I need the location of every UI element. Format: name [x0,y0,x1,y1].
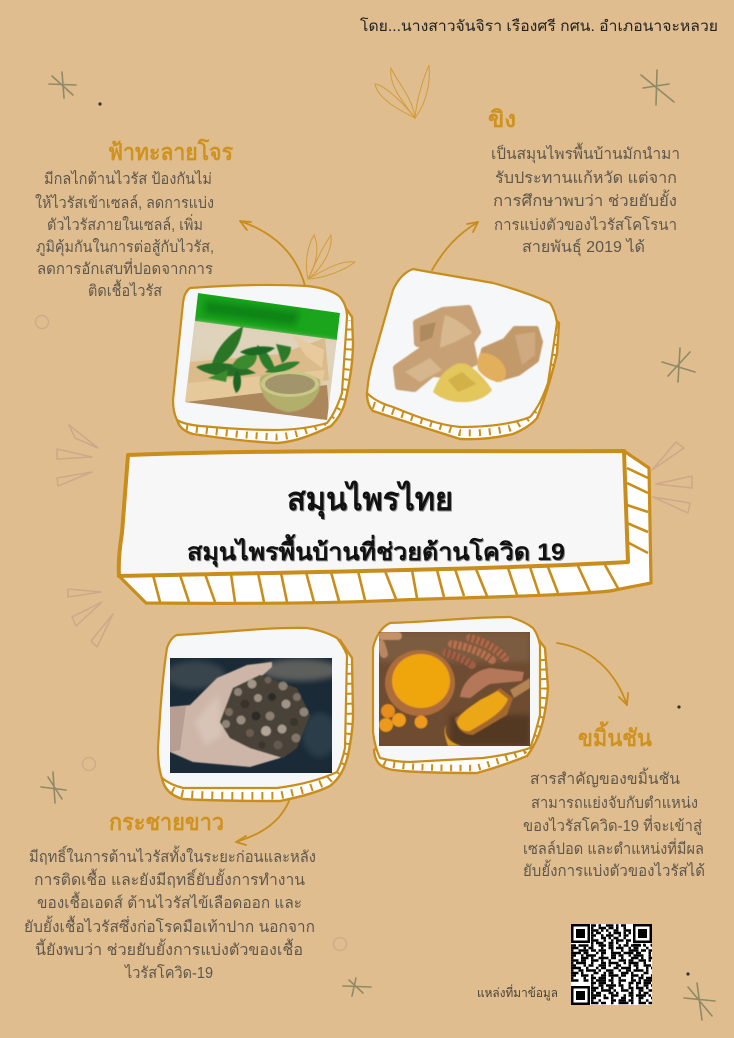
text block: white galangal: การติดเชื้อ และยังมีฤทธิ์ยับยั้งการทำงาน [34,868,305,889]
banner face [119,451,628,576]
text block: white galangal: ยับยั้งเชื้อไวรัสซึ่งก่อโรคมือเท้าปาก นอกจาก [24,915,315,936]
text block: ginger: รับประทานแก้หวัด แต่จาก [495,170,677,187]
author credit: โดย...นางสาวจันจิรา เรืองศรี กศน. อำเภอนาจะหลวย [360,17,718,35]
text block: Andrographis: ลดการอักเสบที่ปอดจากการ [37,258,213,278]
title: สมุนไพรไทย [287,480,453,520]
text block: ginger: เป็นสมุนไพรพื้นบ้านมักนำมา [491,142,680,164]
panel: Andrographis photo [173,285,353,443]
decorative rays left of title [57,425,113,647]
QR code [571,924,652,1005]
text block: white galangal [24,845,316,982]
text block: ginger: สายพันธุ์ 2019 ได้ [522,238,645,257]
arrow: to turmeric text [557,643,628,705]
decorative rays right of title [652,442,692,513]
card edge [162,640,353,801]
photo [185,293,340,420]
panel: title banner [119,451,651,603]
text block: turmeric: สารสำคัญของขมิ้นชัน [530,767,680,788]
text block: white galangal: นี้ยังพบว่า ช่วยยับยั้งการแบ่งตัวของเชื้อ [35,938,303,959]
decorative leaves middle [306,235,355,279]
card edge [367,310,559,439]
text block: Andrographis: ตัวไวรัสภายในเซลล์, เพิ่ม [47,214,203,234]
text block: turmeric: สามารถแย่งจับกับตำแหน่ง [531,795,698,812]
decorative leaves top [375,65,429,118]
card edge [374,635,548,773]
text block: Andrographis: ติดเชื้อไวรัส [88,279,162,300]
source label: แหล่งที่มาข้อมูล [477,984,558,1001]
text block: turmeric [523,767,705,880]
text block: white galangal: มีฤทธิ์ในการต้านไวรัสทั้งในระยะก่อนและหลัง [29,845,316,866]
text block: Andrographis: มีกลไกต้านไวรัส ป้องกันไม่ [44,170,212,188]
arrow: to Andrographis text [240,221,305,286]
banner side and bottom stripes [119,451,651,603]
text block: ginger [491,142,680,257]
heading: white galangal: กระชายขาว [109,809,224,835]
card face [373,617,540,762]
text block: Andrographis: ให้ไวรัสเข้าเซลล์, ลดการแบ่ง [35,194,214,212]
text block: ginger: การศึกษาพบว่า ช่วยยับยั้ง [493,189,677,210]
ginger root [397,309,540,402]
text block: white galangal: ของเชื้อเอดส์ ต้านไวรัสไข้เลือดออก และ [37,891,302,912]
text block: Andrographis [35,170,214,300]
text block: white galangal: ไวรัสโควิด-19 [123,964,213,982]
heading: Andrographis: ฟ้าทะลายโจร [108,138,234,165]
text block: turmeric: เซลล์ปอด และตำแหน่งที่มีผล [523,838,704,858]
heading: ginger: ขิง [488,106,516,132]
text block: turmeric: ยับยั้งการแบ่งตัวของไวรัสได้ [523,859,705,880]
card face [367,269,557,427]
text block: ginger: การแบ่งตัวของไวรัสโคโรนา [494,216,677,234]
text block: turmeric: ของไวรัสโควิด-19 ที่จะเข้าสู่ [523,815,703,836]
panel: white galangal photo [158,628,353,801]
photo [165,658,340,773]
subtitle: สมุนไพรพื้นบ้านที่ช่วยต้านโควิด 19 [187,533,565,568]
arrow: to ginger text [432,222,478,270]
heading: turmeric: ขมิ้นชัน [578,721,652,751]
card face [173,285,347,430]
card edge [177,300,353,443]
photo [379,632,530,746]
panel: ginger photo [367,269,559,439]
panel: turmeric photo [373,617,548,773]
arrow: to white galangal text [236,801,289,845]
text block: Andrographis: ภูมิคุ้มกันในการต่อสู้กับไวรัส, [36,238,214,257]
card face [158,628,347,788]
